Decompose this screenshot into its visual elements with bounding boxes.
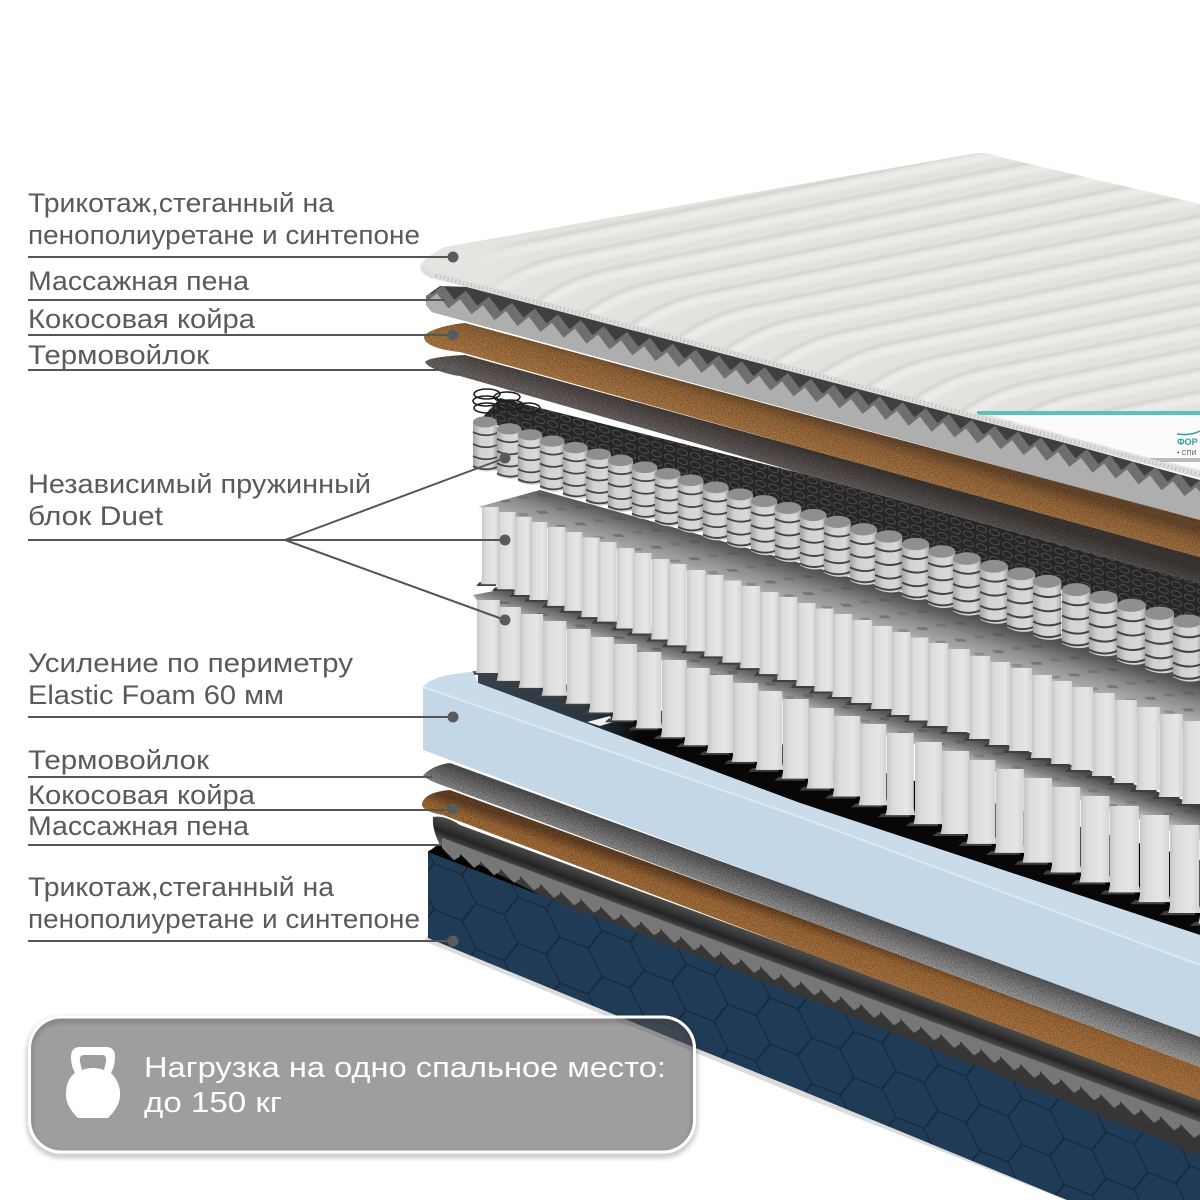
quilting stripes [437, 154, 1200, 450]
product label: ФОР [1177, 437, 1198, 447]
callout: perimeter reinforcement [28, 648, 458, 722]
callout: bottom knit layer: Трикотаж,стеганный на [28, 872, 335, 902]
lower coconut coir layer [422, 790, 1200, 1100]
panel text: до 150 кг [144, 1087, 282, 1119]
lower thermofelt layer [423, 763, 1200, 1067]
callout: bottom knit layer [28, 872, 458, 946]
callout: top knit layer: пенополиуретане и синтепоне [28, 220, 420, 250]
mattress cross-section [420, 153, 1200, 1200]
panel text: Нагрузка на одно спальное место: [144, 1052, 666, 1084]
product label: • СПИ [1177, 450, 1197, 457]
callout: lower thermofelt: Термовойлок [28, 745, 209, 775]
callout: thermofelt: Термовойлок [28, 340, 209, 370]
elastic foam perimeter [423, 672, 1200, 1037]
callout: lower coconut coir [28, 780, 458, 814]
pocket spring block row 3 [469, 588, 1200, 940]
panel text [144, 1052, 666, 1119]
pocket spring block row 2 [476, 490, 1200, 806]
callout: independent spring block: Независимый пружинный [28, 469, 371, 499]
upper coconut coir layer [424, 323, 1200, 557]
callout: lower coconut coir: Кокосовая койра [28, 780, 256, 810]
upper thermofelt layer [425, 355, 1200, 583]
callout: independent spring block [28, 452, 510, 626]
callout: coconut coir [28, 304, 458, 340]
callout: independent spring block: блок Duet [28, 501, 164, 531]
callout: perimeter reinforcement: Elastic Foam 60 мм [28, 680, 284, 710]
upper massage foam layer [420, 280, 1200, 530]
icon: kettlebell [66, 1047, 120, 1118]
callout: top knit layer [28, 188, 458, 262]
open coil spring row 1 [473, 389, 1200, 690]
panel: load per sleeping place [30, 1017, 694, 1152]
callout: lower massage foam: Массажная пена [28, 811, 250, 841]
lower massage foam layer [428, 817, 1200, 1155]
top knitted quilted layer [420, 153, 1200, 478]
bottom knitted quilted layer [426, 850, 1200, 1200]
callout: perimeter reinforcement: Усиление по периметру [28, 648, 354, 678]
callout: coconut coir: Кокосовая койра [28, 304, 256, 334]
callout: bottom knit layer: пенополиуретане и синтепоне [28, 904, 420, 934]
callout: massage foam: Массажная пена [28, 266, 250, 296]
product label [977, 411, 1200, 470]
callout: thermofelt [28, 340, 458, 374]
callout: top knit layer: Трикотаж,стеганный на [28, 188, 335, 218]
